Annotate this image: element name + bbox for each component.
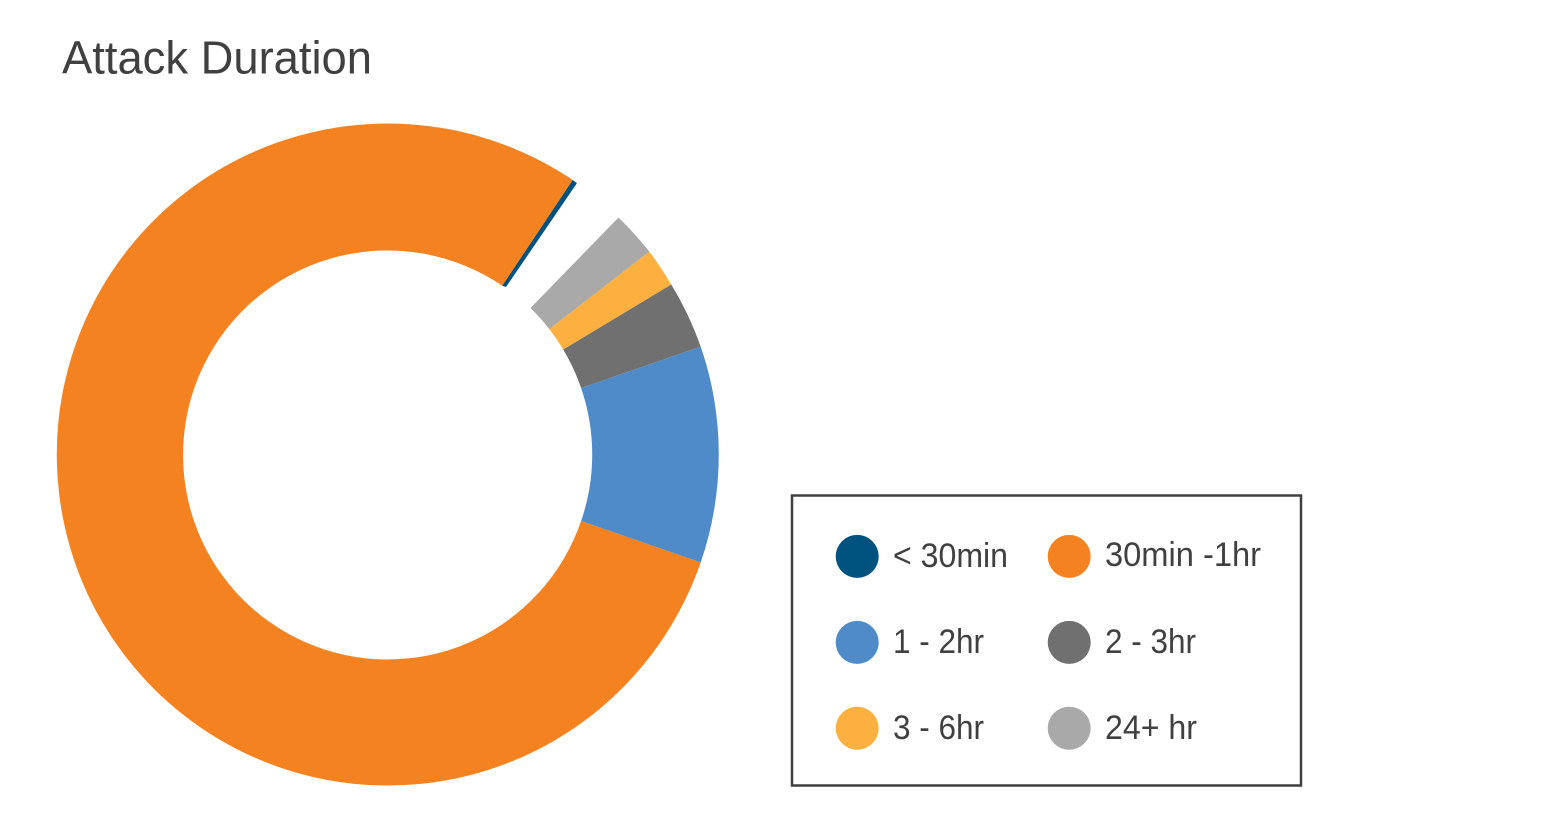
legend item: under 30min (836, 535, 1008, 578)
legend (792, 496, 1301, 786)
legend frame (792, 496, 1301, 786)
legend item: 24+ hr (1048, 707, 1197, 750)
legend item: 30min - 1hr: 30min -1hr (1105, 536, 1261, 574)
legend item: 1 - 2hr (836, 621, 984, 664)
slice: 24+ hr (530, 218, 649, 329)
legend item: 24+ hr: 24+ hr (1105, 709, 1197, 747)
slice: 3 - 6hr (549, 252, 671, 350)
legend item: 2 - 3hr (1048, 621, 1196, 664)
legend item: 3 - 6hr (836, 707, 984, 750)
legend item: 3 - 6hr: 3 - 6hr (893, 709, 984, 747)
slice: 2 - 3hr (563, 284, 701, 388)
legend item: 1 - 2hr: 1 - 2hr (893, 623, 984, 661)
title: Attack Duration (62, 32, 372, 84)
legend item: under 30min: < 30min (893, 537, 1008, 575)
slice: under 30min (502, 180, 577, 287)
legend item: 30min - 1hr (1048, 535, 1261, 578)
slice: 1 - 2hr (581, 347, 719, 562)
donut chart (57, 124, 719, 786)
legend item: 2 - 3hr: 2 - 3hr (1105, 623, 1196, 661)
slice: 30min - 1hr (57, 124, 701, 786)
